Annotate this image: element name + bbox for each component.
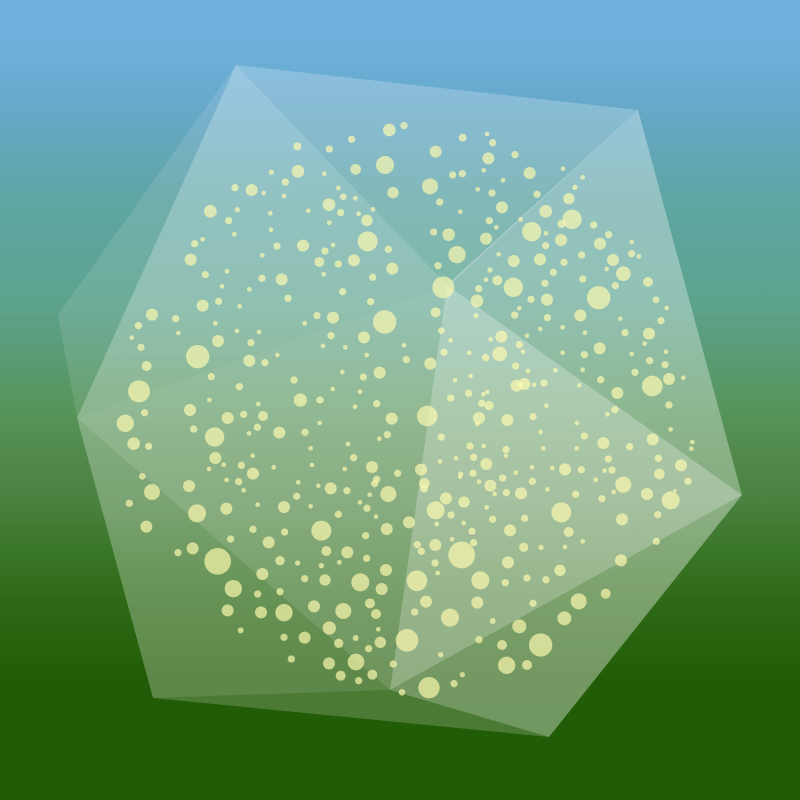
bubbles: lower left cluster xyxy=(117,400,401,684)
bubbles: lower right cluster xyxy=(396,400,695,698)
bubbles: upper left cluster xyxy=(128,124,399,407)
face: upper left xyxy=(77,65,447,418)
face: upper right xyxy=(447,110,742,495)
face: bottom sliver xyxy=(153,690,549,737)
face: far left sliver xyxy=(58,65,236,418)
face: lower right xyxy=(390,495,742,737)
face: top xyxy=(236,65,638,285)
face: lower left xyxy=(77,418,390,698)
face: middle left xyxy=(77,285,447,690)
bubbles: upper right cluster xyxy=(400,122,686,402)
face: bright lower right xyxy=(390,285,742,690)
polyhedron faces xyxy=(58,65,742,737)
